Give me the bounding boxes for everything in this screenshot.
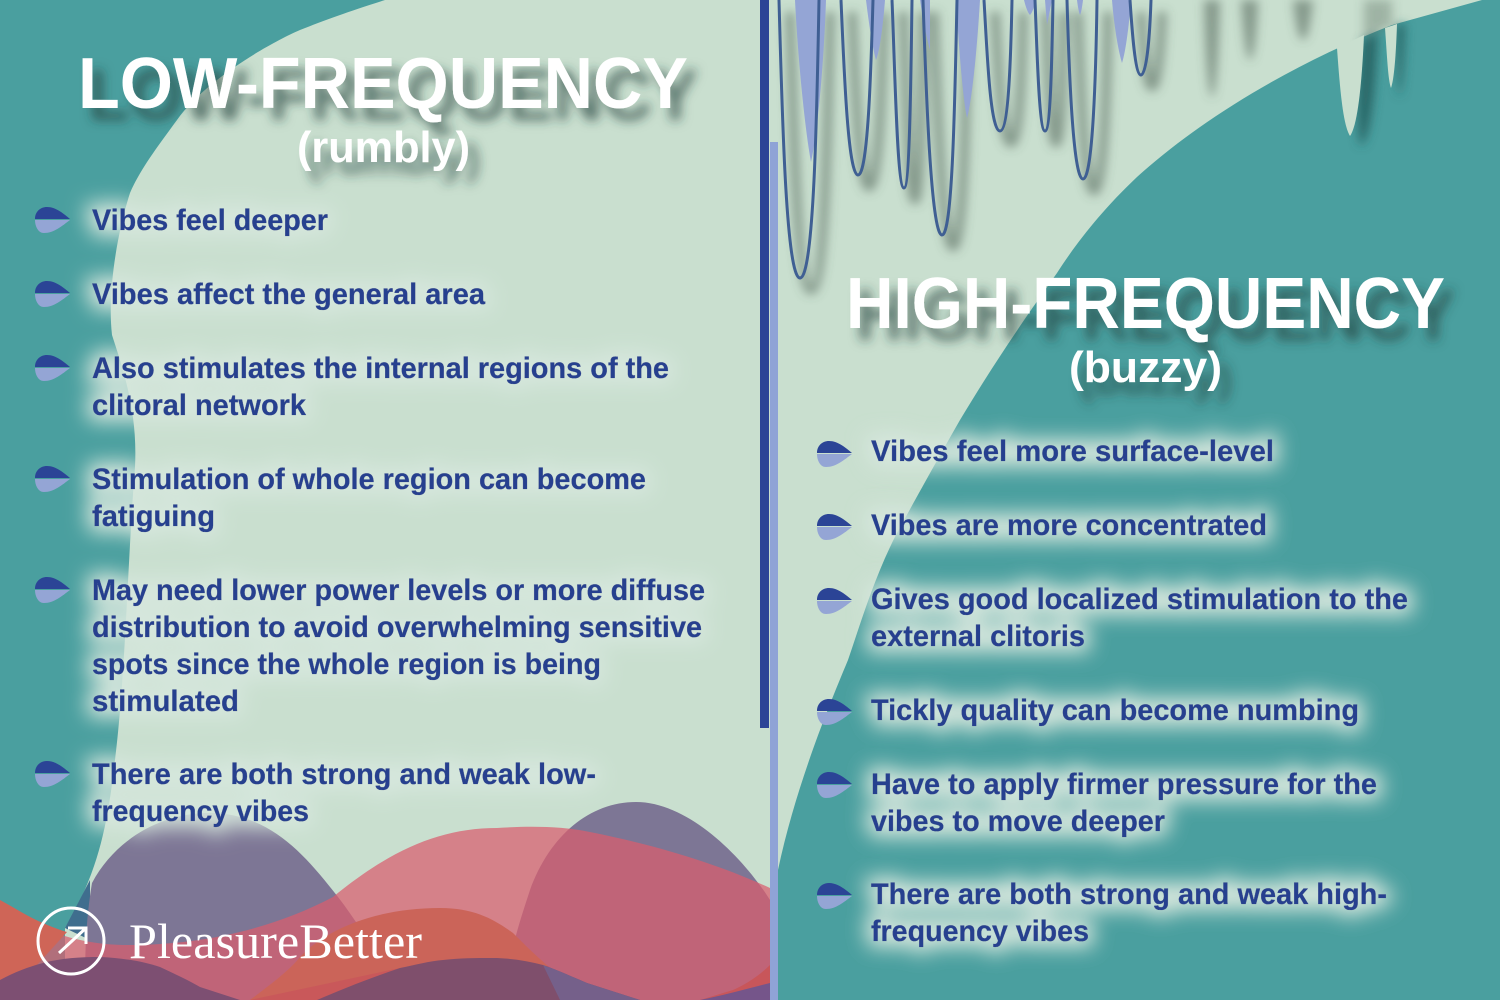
point: internal regions: clitoral network bbox=[92, 389, 306, 422]
point: lower power levels bbox=[92, 574, 705, 718]
point: internal regions bbox=[92, 352, 669, 422]
subtitle: rumbly: (rumbly) bbox=[297, 123, 470, 172]
point: localized stimulation: Gives good localized stimulation to the bbox=[871, 583, 1408, 616]
bottom waves decoration bbox=[0, 802, 770, 1000]
point: lower power levels: May need lower power levels or more diffuse bbox=[92, 574, 705, 607]
blue filled wave spikes bbox=[795, 0, 1131, 162]
point: fatiguing: Stimulation of whole region can become bbox=[92, 463, 646, 496]
light spikes over teal bbox=[1337, 24, 1397, 136]
icons: low-frequency bullets bbox=[35, 207, 70, 787]
point: lower power levels: spots since the whole region is being bbox=[92, 648, 601, 681]
point: strong and weak high-frequency: There are both strong and weak high- bbox=[871, 878, 1387, 911]
dark line wave spikes bbox=[779, 0, 1151, 278]
left panel background bbox=[0, 0, 770, 1000]
logo: PleasureBetter bbox=[38, 908, 422, 974]
point: vibes feel deeper: Vibes feel deeper bbox=[92, 204, 328, 237]
point: strong and weak low-frequency: There are both strong and weak low- bbox=[92, 758, 596, 791]
point: localized stimulation bbox=[871, 583, 1408, 653]
point: internal regions: Also stimulates the internal regions of the bbox=[92, 352, 669, 385]
point: lower power levels: distribution to avoid overwhelming sensitive bbox=[92, 611, 702, 644]
icon: circled arrow bbox=[38, 908, 104, 974]
point: strong and weak low-frequency bbox=[92, 758, 596, 828]
point: localized stimulation: external clitoris bbox=[871, 620, 1085, 653]
title: high-frequency: HIGH-FREQUENCY bbox=[846, 264, 1445, 344]
point: strong and weak high-frequency: frequency vibes bbox=[871, 915, 1089, 948]
wave spike shadows bbox=[790, 0, 1405, 290]
point: fatiguing bbox=[92, 463, 646, 533]
point: firmer pressure bbox=[871, 768, 1377, 838]
point: numbing: Tickly quality can become numbing bbox=[871, 694, 1359, 727]
point: vibes affect the general area: Vibes affect the general area bbox=[92, 278, 485, 311]
list: high-frequency points bbox=[871, 435, 1408, 948]
right panel background bbox=[770, 0, 1500, 1000]
list: low-frequency points bbox=[92, 204, 705, 828]
point: strong and weak low-frequency: frequency vibes bbox=[92, 795, 309, 828]
point: firmer pressure: vibes to move deeper bbox=[871, 805, 1165, 838]
point: concentrated: Vibes are more concentrated bbox=[871, 509, 1267, 542]
logo wordmark: PleasureBetter bbox=[129, 913, 422, 969]
point: strong and weak high-frequency bbox=[871, 878, 1387, 948]
point: fatiguing: fatiguing bbox=[92, 500, 215, 533]
icons: high-frequency bullets bbox=[817, 441, 852, 909]
subtitle: buzzy: (buzzy) bbox=[1069, 343, 1222, 392]
center divider bars bbox=[760, 0, 778, 1000]
point: firmer pressure: Have to apply firmer pressure for the bbox=[871, 768, 1377, 801]
point: surface-level: Vibes feel more surface-level bbox=[871, 435, 1274, 468]
point: lower power levels: stimulated bbox=[92, 685, 239, 718]
title: low-frequency: LOW-FREQUENCY bbox=[78, 44, 688, 124]
